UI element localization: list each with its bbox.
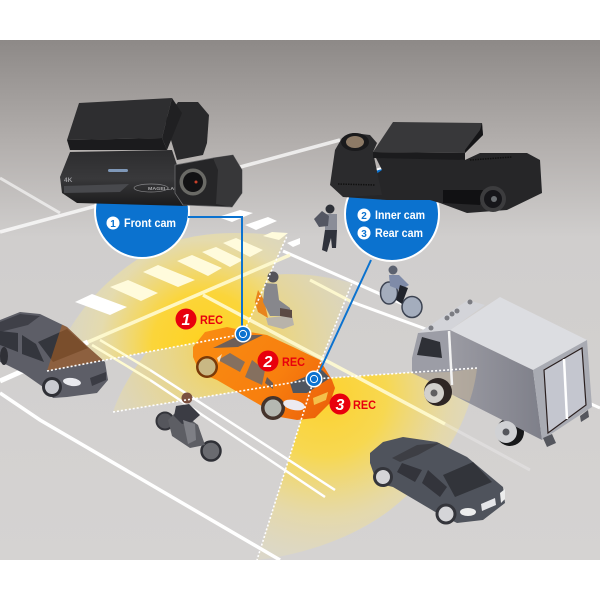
callout: front cam: Front cam [124,216,176,230]
connector: front cam to windshield [188,217,242,334]
marker: front camera position [234,326,252,342]
rec badge 3 [330,394,376,414]
rider: motorcycle [156,392,220,460]
rec badge 1: 1 [182,312,191,329]
dotted cone edges [47,236,477,560]
coverage cone: rear cam [257,368,477,560]
coverage cone: front cam [47,233,287,371]
vehicle: dark sedan, lower right [370,437,505,524]
vehicle: orange car with inner cam [193,327,335,420]
rec badge 1: REC [200,315,223,327]
callout: inner and rear cam [345,167,439,261]
callout: front cam [95,164,189,258]
coverage cone: inner cam [113,274,352,412]
product: inner and rear dash cam [330,122,542,213]
callout: inner and rear cam: Rear cam [375,226,423,240]
callout: front cam: 1 [110,219,116,230]
rec badge 3: 3 [336,397,345,414]
vehicle: delivery truck [412,297,592,446]
product: front dash cam: MAGELLAN [148,186,179,191]
cone tint over vehicles [47,260,477,540]
callout: inner and rear cam: Inner cam [375,208,425,222]
rec badge 3: REC [353,400,376,412]
callout: inner and rear cam: 3 [361,229,367,240]
road: lane lines [0,140,600,560]
rider: scooter [255,272,294,329]
rec badge 2: 2 [263,354,273,371]
cyclist [380,266,422,318]
pedestrian with bag [314,204,337,252]
product: front dash cam [60,98,242,207]
truck wheels and roof details [424,300,589,447]
road: lane lines tinted inside the coverage zones [88,255,445,424]
product: front dash cam: 4K [64,177,73,184]
vehicle: grey sedan, left [0,312,108,398]
rec badge 1 [176,308,223,330]
crosswalk stripes [75,210,300,315]
marker: rear camera position [306,370,322,388]
rec badge 2 [258,350,305,372]
connector: inner and rear cam to rear window [316,260,371,379]
callout: inner and rear cam: 2 [361,211,367,222]
rec badge 2: REC [282,357,305,369]
